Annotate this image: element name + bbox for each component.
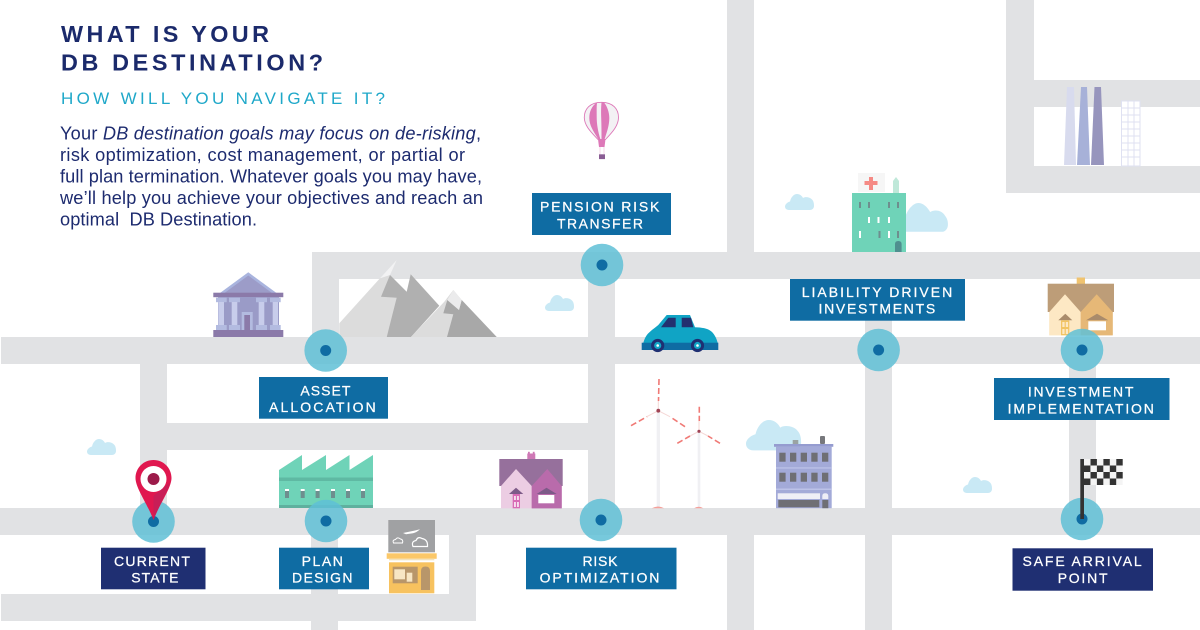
- label: pension risk transfer: TRANSFER: [557, 215, 643, 231]
- label: current state: CURRENT: [114, 553, 190, 569]
- icon: bank: [213, 272, 283, 337]
- label: pension risk transfer: PENSION RISK: [540, 199, 660, 215]
- icon: location pin: [136, 460, 172, 520]
- icon: cloud left: [87, 439, 116, 455]
- intro text block: full plan termination. Whatever goals you may have,: [60, 166, 482, 186]
- label: asset allocation: ALLOCATION: [269, 399, 376, 415]
- subtitle: HOW WILL YOU NAVIGATE IT?: [61, 89, 385, 108]
- marker: investment implementation: [1061, 329, 1103, 371]
- label: liability driven investments: INVESTMENTS: [818, 300, 935, 316]
- label: asset allocation: [259, 377, 388, 419]
- icon: shop with billboard: [387, 520, 437, 593]
- icon: wind turbines: [631, 379, 720, 508]
- intro text block: we’ll help you achieve your objectives and reach an: [59, 188, 483, 208]
- label: plan design: PLAN: [302, 553, 343, 569]
- icon: cloud near mountains: [545, 295, 574, 311]
- marker: current state: [132, 500, 175, 543]
- icon: city towers: [1064, 87, 1140, 166]
- intro text block: risk optimization, cost management, or partial or: [60, 145, 465, 165]
- icon: purple house: [499, 452, 563, 508]
- icon: mountains: [339, 260, 497, 337]
- marker: asset allocation: [304, 329, 347, 372]
- label: liability driven investments: [790, 279, 965, 321]
- label: risk optimization: [526, 548, 676, 589]
- title: [61, 21, 323, 76]
- marker: pension risk transfer: [581, 244, 623, 286]
- marker: risk optimization: [580, 499, 622, 541]
- icon: car: [642, 315, 718, 352]
- marker: safe arrival point: [1061, 498, 1103, 540]
- label: investment implementation: [994, 378, 1170, 420]
- label: risk optimization: OPTIMIZATION: [540, 570, 659, 586]
- marker: plan design: [305, 500, 347, 542]
- intro text block: [59, 124, 483, 230]
- label: plan design: DESIGN: [292, 570, 352, 586]
- label: plan design: [279, 548, 369, 589]
- label: asset allocation: ASSET: [300, 382, 351, 398]
- title: DB DESTINATION?: [61, 50, 323, 76]
- label: pension risk transfer: [532, 193, 671, 235]
- label: safe arrival point: POINT: [1058, 570, 1108, 586]
- icon: cloud left of hospital: [785, 194, 814, 210]
- label: safe arrival point: [1012, 548, 1153, 591]
- label: risk optimization: RISK: [582, 553, 618, 569]
- icon: cloud right of hospital: [905, 203, 948, 232]
- intro text block: optimal DB Destination.: [60, 210, 257, 230]
- label: liability driven investments: LIABILITY DRIVEN: [802, 284, 952, 300]
- title: WHAT IS YOUR: [61, 21, 269, 47]
- label: investment implementation: IMPLEMENTATION: [1008, 400, 1154, 416]
- icon: cloud lower right: [963, 477, 992, 493]
- icon: hot air balloon: [584, 102, 618, 159]
- icon: apartment building: [774, 436, 833, 508]
- label: current state: STATE: [131, 570, 178, 586]
- label: current state: [101, 548, 206, 589]
- marker: liability driven investments: [857, 329, 900, 371]
- icon: factory: [279, 455, 373, 508]
- label: investment implementation: INVESTMENT: [1028, 384, 1134, 400]
- intro text block: Your DB destination goals may focus on de-risking,: [60, 124, 481, 144]
- icon: checkered flag: [1080, 459, 1123, 519]
- icon: large cloud behind building: [746, 420, 801, 450]
- icon: tan house: [1048, 278, 1114, 335]
- label: safe arrival point: SAFE ARRIVAL: [1022, 553, 1142, 569]
- icon: hospital: [852, 173, 906, 252]
